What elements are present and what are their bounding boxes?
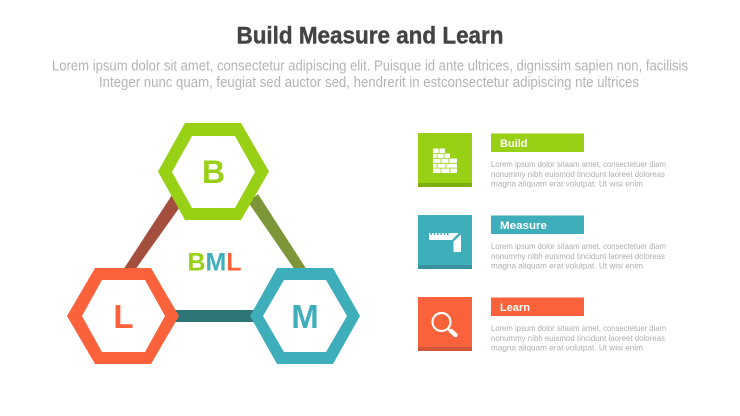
panel: build bbox=[418, 133, 666, 188]
subtitle bbox=[52, 58, 688, 91]
subtitle: Integer nunc quam, feugiat sed auctor sed, hendrerit in estconsectetur adipiscing nte ultrices bbox=[99, 75, 639, 91]
text block: measure: nonummy nibh euismod tincidunt laoreet doloreas bbox=[491, 251, 665, 261]
text block: build: nonummy nibh euismod tincidunt laoreet doloreas bbox=[491, 169, 665, 179]
text block: learn: magna aliquam erat volutpat. Ut wisi enim bbox=[491, 342, 643, 352]
hexagon: measure: M bbox=[291, 298, 319, 335]
label bar: build bbox=[491, 134, 584, 152]
hexagon: build: B bbox=[202, 154, 225, 190]
label bar: learn bbox=[491, 298, 584, 316]
text block: build bbox=[491, 159, 666, 188]
triangle diagram bbox=[67, 123, 360, 364]
icon: brick wall bbox=[418, 133, 472, 187]
text block: measure: magna aliquam erat volutpat. Ut wisi enim bbox=[491, 260, 643, 270]
label bar: measure: Measure bbox=[500, 220, 547, 232]
center label: BML: BML bbox=[188, 248, 242, 276]
text block: build: Lorem ipsum dolor sitaam amet, consectetuer diam bbox=[491, 159, 666, 169]
hexagon: learn: L bbox=[113, 298, 134, 335]
text block: learn: Lorem ipsum dolor sitaam amet, consectetuer diam bbox=[491, 323, 666, 333]
label bar: build: Build bbox=[500, 138, 528, 150]
panel: measure bbox=[418, 215, 666, 270]
text block: learn bbox=[491, 323, 666, 352]
hexagon: learn bbox=[67, 268, 179, 364]
text block: measure bbox=[491, 241, 666, 270]
title: Build Measure and Learn bbox=[236, 22, 504, 50]
icon: magnifying glass bbox=[418, 297, 472, 351]
connector: learn to measure bbox=[170, 310, 260, 322]
connector: build to learn bbox=[123, 195, 182, 270]
hexagon: build bbox=[158, 123, 269, 220]
connector: build to measure bbox=[248, 194, 307, 270]
label bar: measure bbox=[491, 216, 584, 234]
panel: learn bbox=[418, 297, 666, 352]
icon: ruler square bbox=[418, 215, 472, 269]
hexagon: measure bbox=[250, 268, 360, 364]
text block: learn: nonummy nibh euismod tincidunt laoreet doloreas bbox=[491, 333, 665, 343]
text block: measure: Lorem ipsum dolor sitaam amet, consectetuer diam bbox=[491, 241, 666, 251]
text block: build: magna aliquam erat volutpat. Ut wisi enim bbox=[491, 178, 643, 188]
subtitle: Lorem ipsum dolor sit amet, consectetur adipiscing elit. Puisque id ante ultrices, dignissim sapien non, facilisis bbox=[52, 58, 688, 74]
label bar: learn: Learn bbox=[500, 302, 530, 314]
